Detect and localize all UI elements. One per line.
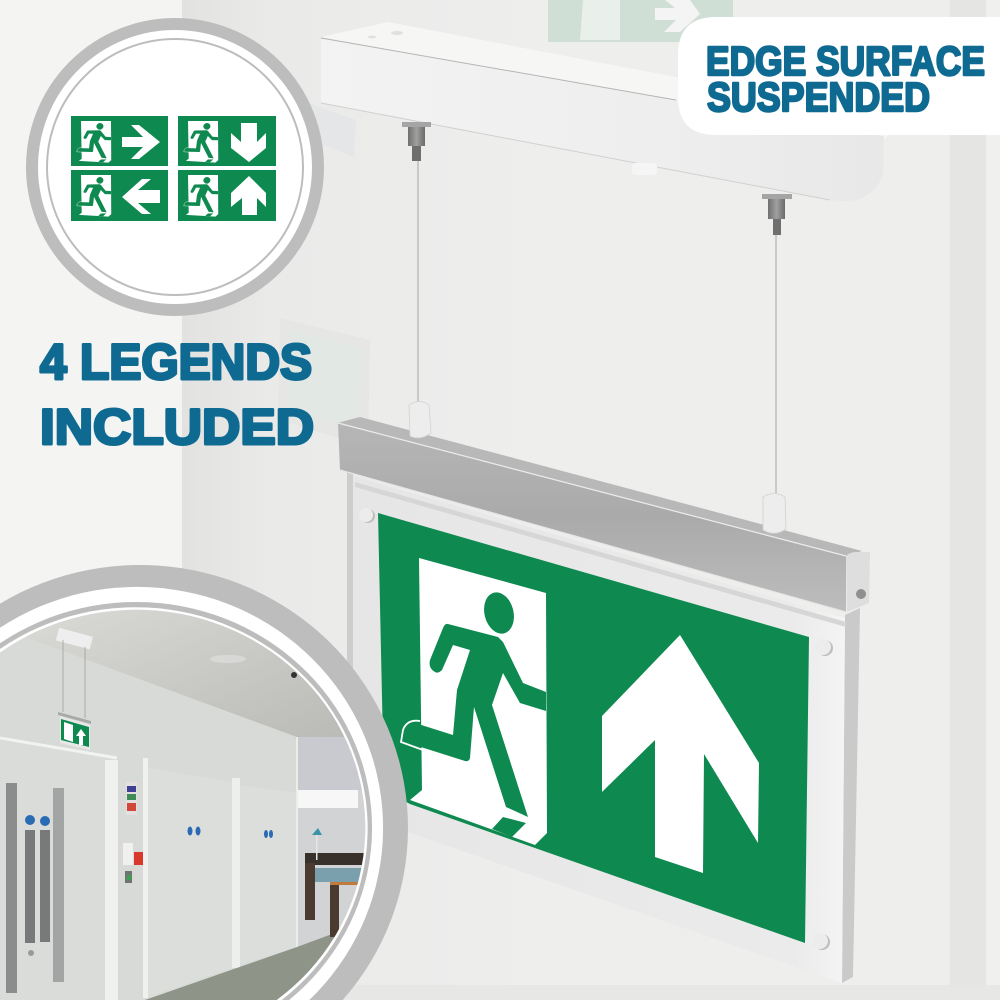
right wire and fitting xyxy=(762,194,792,493)
heading: 4 legends included: 4 LEGENDS xyxy=(40,334,312,390)
exit sign luminaire xyxy=(337,402,870,983)
photo content xyxy=(0,600,370,1000)
sign: exit up xyxy=(178,169,276,223)
faded background exit sign xyxy=(548,0,733,42)
heading: 4 legends included: INCLUDED xyxy=(40,399,314,455)
left wire and fitting xyxy=(402,122,431,402)
cable ferrules xyxy=(409,402,786,533)
door and running man xyxy=(401,558,547,845)
badge: edge surface suspended: SUSPENDED xyxy=(707,74,930,120)
green legend xyxy=(378,513,809,943)
up arrow xyxy=(602,635,759,873)
heading: 4 legends included xyxy=(40,334,314,455)
panel screws xyxy=(359,508,833,950)
badge: edge surface suspended xyxy=(678,17,1000,135)
circle photo: installed corridor xyxy=(0,565,408,1000)
sign: exit right xyxy=(71,115,168,169)
acrylic side edge xyxy=(842,608,860,983)
aluminium bar xyxy=(337,417,870,612)
ceiling mount box xyxy=(321,22,900,201)
circle: four legends xyxy=(32,24,318,310)
sign: exit left xyxy=(71,169,168,223)
acrylic panel xyxy=(350,475,845,983)
sign: exit down xyxy=(178,115,276,169)
